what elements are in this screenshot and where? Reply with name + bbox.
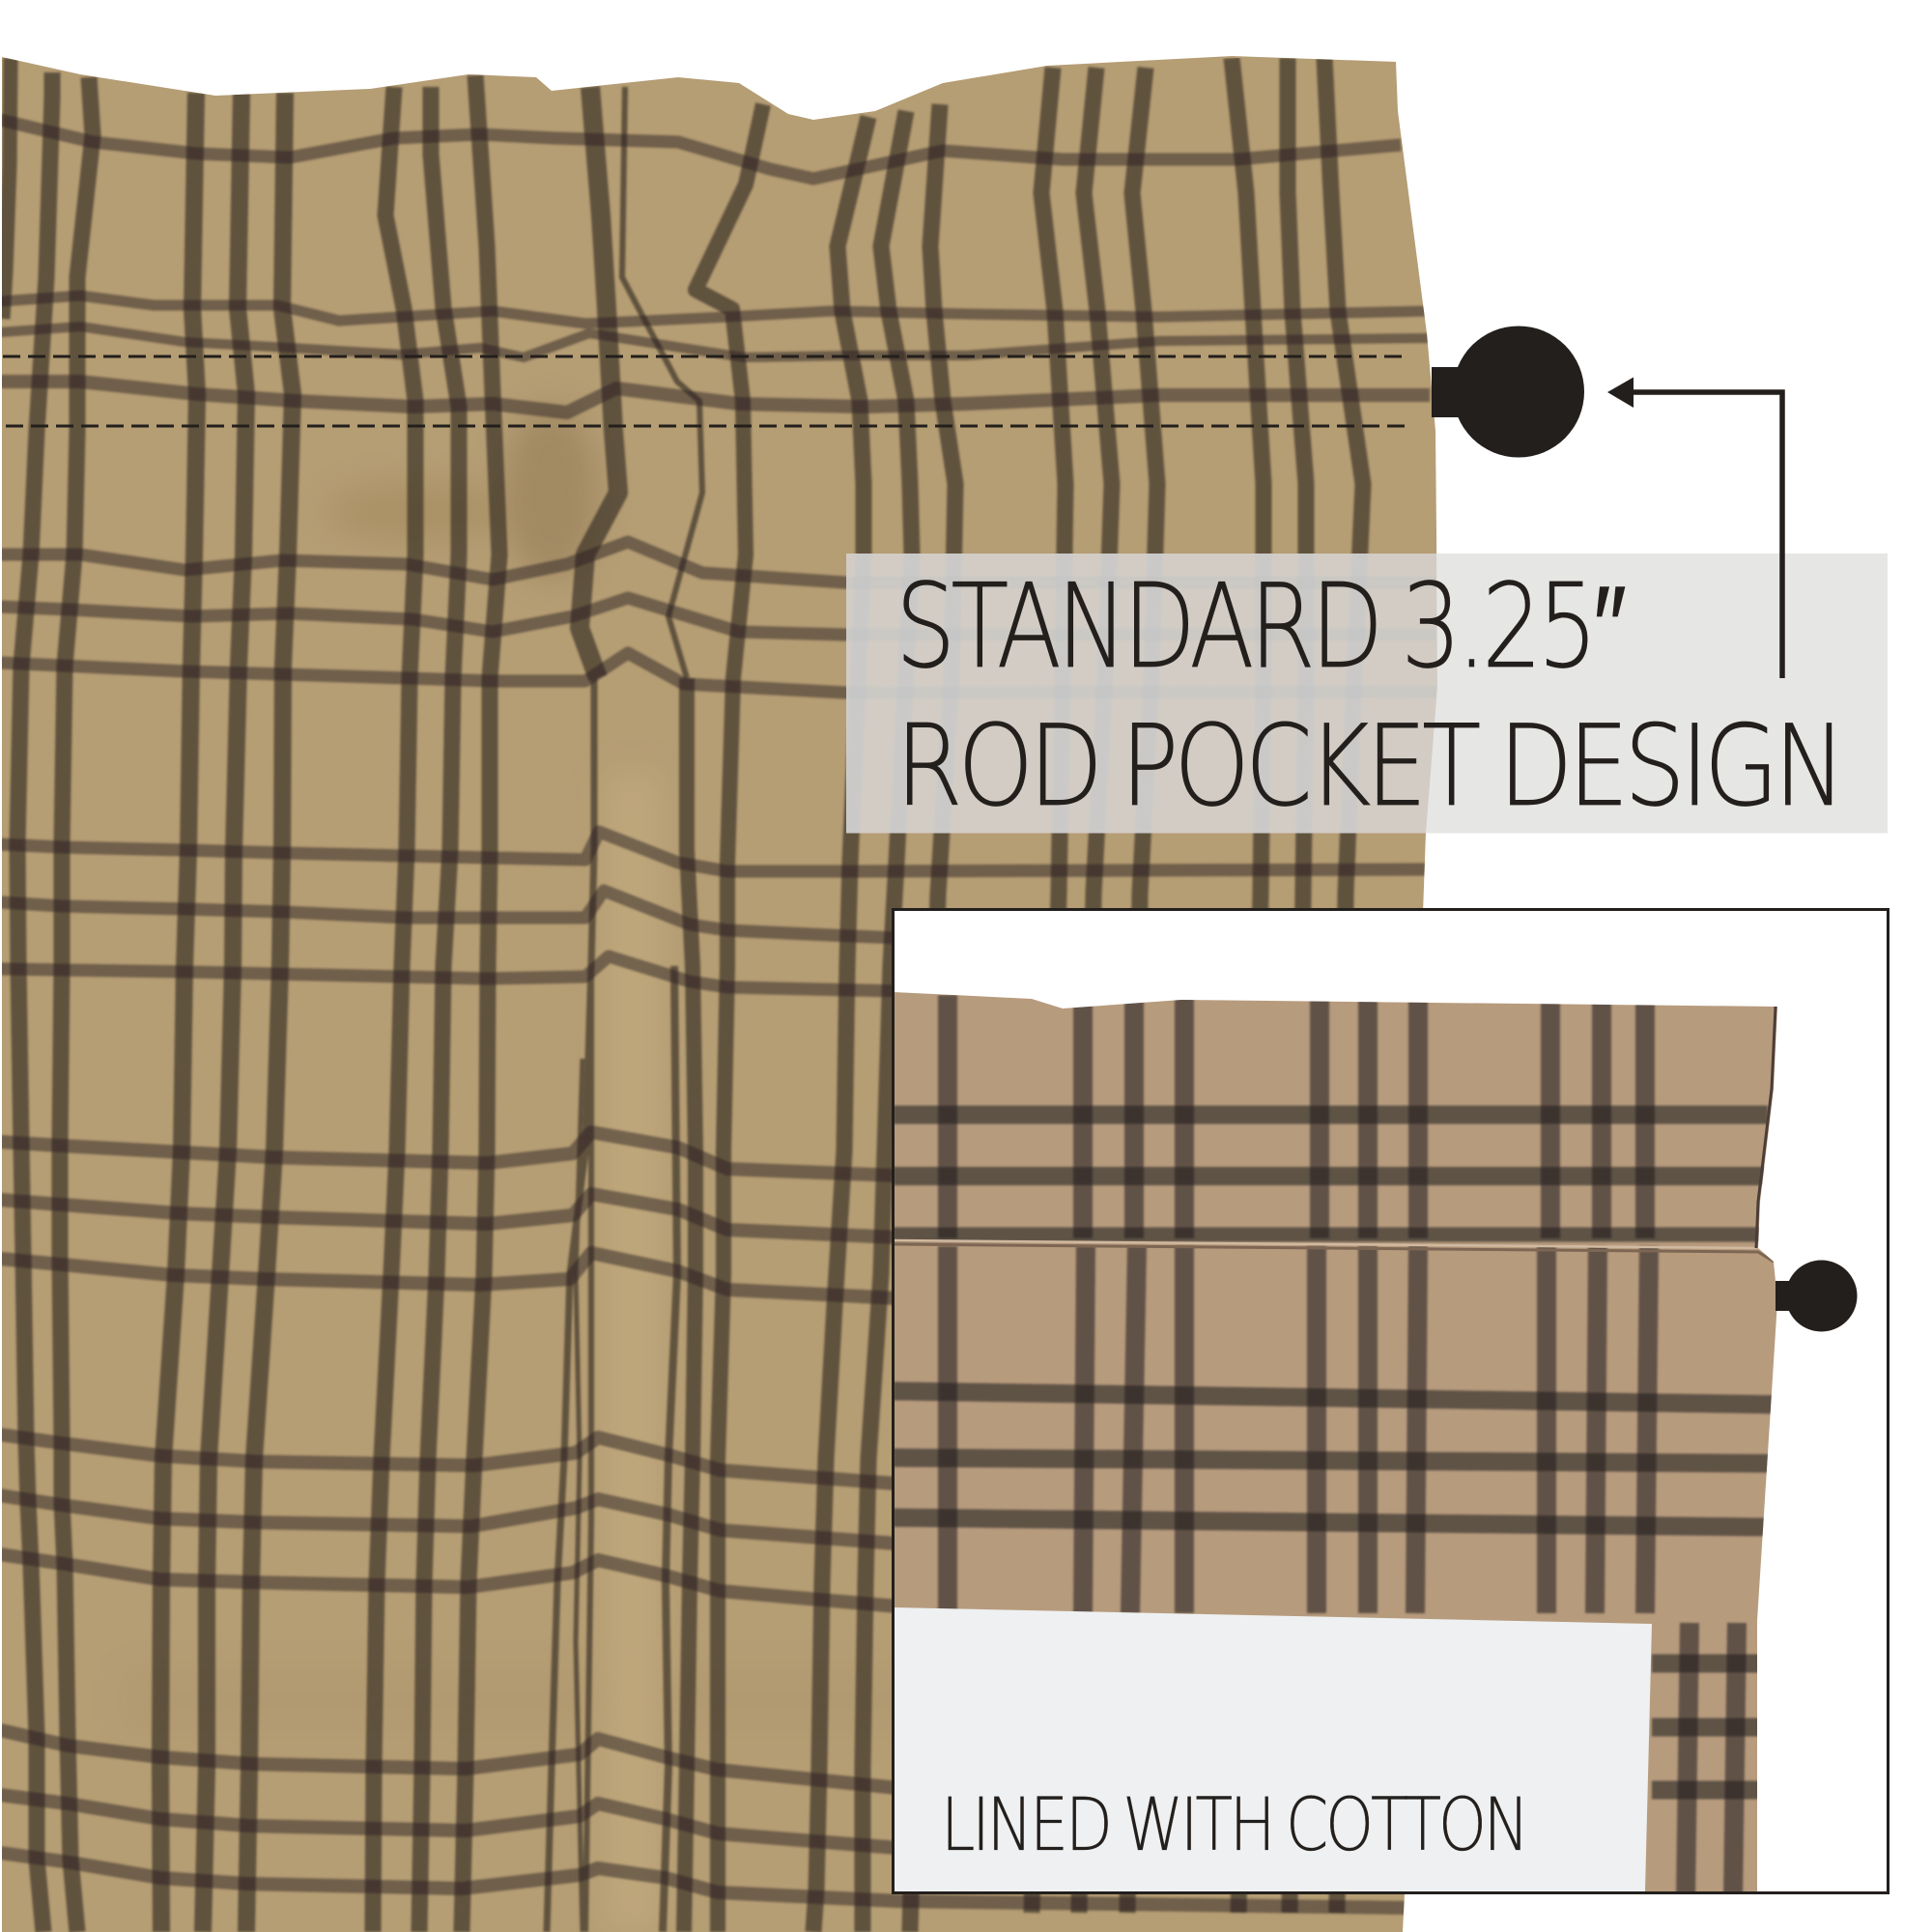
dashed rod pocket lines <box>3 356 1411 426</box>
heading: standard rod pocket: STANDARD 3.25″ <box>895 560 1626 695</box>
lining caption: LINED WITH COTTON <box>941 1781 1526 1867</box>
heading: standard rod pocket <box>895 560 1841 832</box>
inset frame edge <box>893 910 1888 1893</box>
white cotton lining <box>894 1607 1652 1891</box>
inset rod finial <box>1776 1260 1857 1331</box>
arrow to rod <box>1607 377 1782 678</box>
curtain rod finial <box>1432 327 1584 458</box>
panel: lining detail inset <box>889 910 1888 1898</box>
inset fabric with plaid <box>889 985 1787 1898</box>
curtain fabric photo <box>0 39 1449 1932</box>
